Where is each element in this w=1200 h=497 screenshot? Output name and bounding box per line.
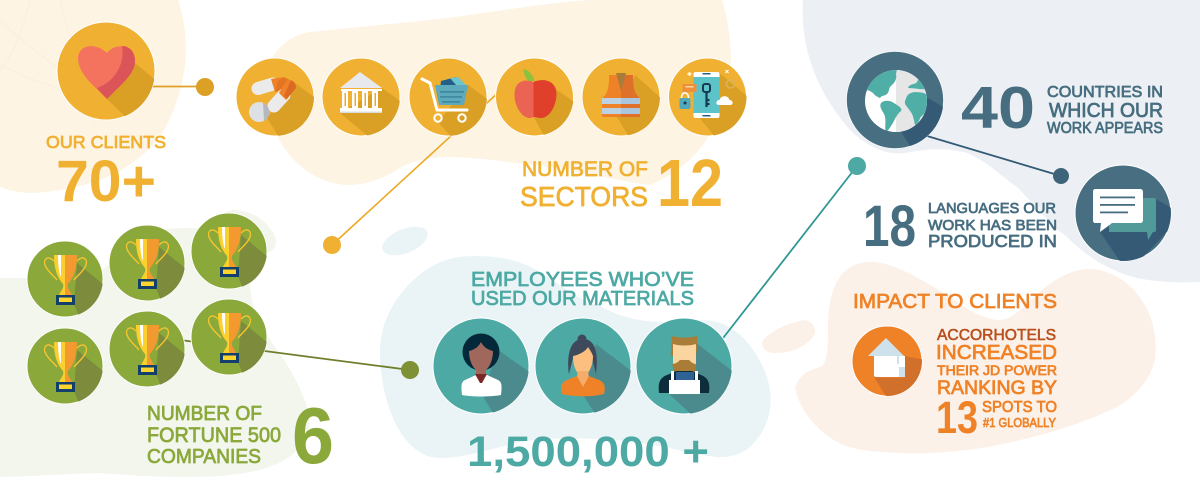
background blob: small blue xyxy=(378,221,432,261)
text: fortune 500: 6 xyxy=(292,391,334,480)
icon: bank xyxy=(322,58,400,136)
text: fortune 500 xyxy=(147,391,334,480)
icon: employee 3 xyxy=(636,318,732,414)
background blob: sectors xyxy=(263,0,731,185)
icon: trophy 1 xyxy=(27,241,109,323)
icon: employee 2 xyxy=(534,318,632,414)
text: fortune 500: FORTUNE 500 xyxy=(147,424,281,447)
text: our clients: 70+ xyxy=(56,149,156,214)
trophies group xyxy=(27,213,273,410)
heading: impact to clients: IMPACT TO CLIENTS xyxy=(853,290,1057,313)
text: accorhotels case xyxy=(936,327,1057,443)
stat: employees: 1,500,000 + xyxy=(467,428,709,476)
heading: employees: USED OUR MATERIALS xyxy=(471,287,694,310)
icon: trophy 2 xyxy=(109,225,191,307)
icon: trophy 4 xyxy=(27,328,109,410)
text: accorhotels case: SPOTS TO xyxy=(982,399,1057,416)
text: 18 languages: 18 xyxy=(863,194,916,259)
text: number of sectors xyxy=(520,146,723,221)
text: fortune 500: NUMBER OF xyxy=(147,402,262,425)
text: accorhotels case: THEIR JD POWER xyxy=(937,363,1057,378)
background blob: small orange xyxy=(762,320,815,353)
heading: employees: EMPLOYEES WHO’VE xyxy=(471,268,694,291)
text: 40 countries: WORK APPEARS xyxy=(1047,120,1163,137)
icon: trophy 5 xyxy=(109,311,191,393)
icon: employee 1 xyxy=(432,318,530,414)
text: 18 languages: PRODUCED IN xyxy=(928,231,1057,251)
connector: sectors xyxy=(323,91,500,254)
text: number of sectors: 12 xyxy=(657,146,723,221)
text: 18 languages: WORK HAS BEEN xyxy=(928,217,1057,234)
text: 40 countries: WHICH OUR xyxy=(1049,100,1163,122)
text: our clients: OUR CLIENTS xyxy=(46,132,166,152)
text: 40 countries: 40 xyxy=(961,75,1035,141)
icon: pills xyxy=(236,58,314,136)
text: 40 countries: COUNTRIES IN xyxy=(1047,84,1163,101)
background blob: employees xyxy=(380,256,771,458)
connector: clients xyxy=(150,78,214,96)
text: number of sectors: NUMBER OF xyxy=(522,157,648,181)
background blob: impact xyxy=(795,262,1156,453)
background blob: global reach xyxy=(803,0,1200,282)
text: accorhotels case: RANKING BY xyxy=(937,378,1057,399)
text: fortune 500: COMPANIES xyxy=(147,445,261,468)
connector: fortune 500 xyxy=(180,340,419,379)
text: number of sectors: SECTORS xyxy=(520,181,648,212)
icon: heart xyxy=(56,22,156,120)
text: accorhotels case: INCREASED xyxy=(936,341,1057,364)
icon: phone security xyxy=(668,58,746,136)
background blob: fortune 500 xyxy=(0,210,309,477)
icon: globe xyxy=(846,51,944,149)
text: accorhotels case: 13 xyxy=(936,392,978,443)
icon: trophy 3 xyxy=(191,213,273,295)
text: accorhotels case: ACCORHOTELS xyxy=(937,327,1056,344)
icon: safety vest xyxy=(582,58,660,136)
text: our clients xyxy=(46,132,166,214)
icon: chat bubbles xyxy=(1074,164,1172,262)
icon: shopping cart xyxy=(408,58,488,136)
connector: employees xyxy=(720,157,866,342)
text: 40 countries xyxy=(961,75,1163,141)
icon: house xyxy=(852,326,922,396)
icon: trophy 6 xyxy=(191,299,273,381)
background blob: clients xyxy=(0,0,186,193)
icon: apple xyxy=(495,58,574,136)
heading: employees xyxy=(471,268,694,310)
connector: countries xyxy=(917,133,1069,184)
text: 18 languages: LANGUAGES OUR xyxy=(928,200,1056,217)
text: 18 languages xyxy=(863,194,1057,259)
text: accorhotels case: #1 GLOBALLY xyxy=(983,415,1056,430)
